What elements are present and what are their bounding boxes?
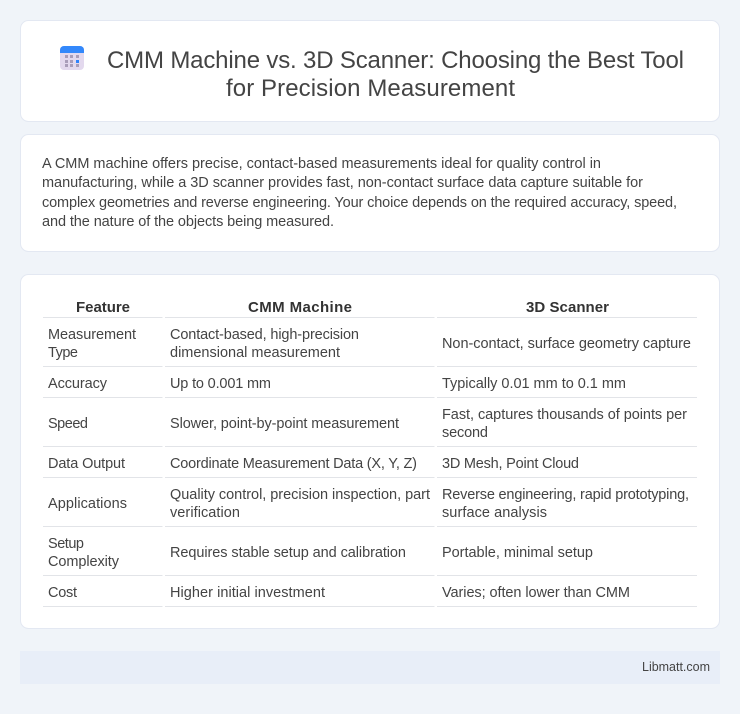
row: applications	[48, 487, 689, 521]
footer credit: Libmatt.com	[642, 660, 710, 674]
row: measurement type: dimensional measurement	[170, 345, 340, 361]
row: accuracy: Typically 0.01 mm to 0.1 mm	[442, 376, 626, 392]
row: applications: Quality control, precision inspection, part	[170, 487, 430, 503]
row: setup complexity: Complexity	[48, 554, 120, 570]
row: setup complexity: Portable, minimal setup	[442, 545, 593, 561]
footer bar	[20, 651, 720, 684]
text block: summary	[42, 156, 677, 230]
text block: summary: and the nature of the objects being measured.	[42, 214, 334, 230]
row: accuracy: Up to 0.001 mm	[170, 376, 271, 392]
row: measurement type: Non-contact, surface geometry capture	[442, 336, 691, 352]
row: cost	[48, 585, 630, 601]
panel: comparison table	[20, 274, 720, 628]
row: measurement type: Type	[48, 345, 78, 361]
row: setup complexity: Setup	[48, 536, 84, 552]
row: cost: Cost	[48, 585, 77, 601]
row: speed: Speed	[48, 416, 88, 432]
panel: title header	[20, 20, 720, 122]
row: setup complexity	[48, 536, 593, 570]
text block: summary: manufacturing, while a 3D scanner provides fast, non-contact surface data capture suitable for	[42, 175, 643, 191]
title	[107, 47, 684, 102]
row: speed: second	[442, 425, 488, 441]
row: cost: Higher initial investment	[170, 585, 325, 601]
row: applications: surface analysis	[442, 505, 547, 521]
row: measurement type	[48, 327, 691, 361]
panel: intro paragraph	[20, 134, 720, 252]
row: data output	[48, 456, 579, 472]
text block: summary: complex geometries and reverse engineering. Your choice depends on the required accuracy, speed,	[42, 195, 677, 211]
row: speed: Fast, captures thousands of points per	[442, 407, 687, 423]
row: applications: Applications	[48, 496, 127, 512]
row: accuracy	[48, 376, 626, 392]
title: CMM Machine vs. 3D Scanner: Choosing the Best Tool	[107, 47, 684, 74]
table header row	[76, 299, 609, 316]
row: accuracy: Accuracy	[48, 376, 108, 392]
row: applications: verification	[170, 505, 240, 521]
table header row: Feature	[76, 299, 130, 316]
row: data output: Data Output	[48, 456, 125, 472]
row: data output: 3D Mesh, Point Cloud	[442, 456, 579, 472]
row: cost: Varies; often lower than CMM	[442, 585, 630, 601]
text block: summary: A CMM machine offers precise, contact-based measurements ideal for quality control in	[42, 156, 601, 172]
title: for Precision Measurement	[226, 75, 515, 102]
table header row: 3D Scanner	[526, 299, 609, 316]
row: setup complexity: Requires stable setup and calibration	[170, 545, 406, 561]
row: speed: Slower, point-by-point measurement	[170, 416, 399, 432]
row: measurement type: Contact-based, high-precision	[170, 327, 359, 343]
table header row: CMM Machine	[248, 299, 352, 316]
icon: calendar grid	[60, 46, 84, 70]
row: data output: Coordinate Measurement Data (X, Y, Z)	[170, 456, 417, 472]
row: measurement type: Measurement	[48, 327, 136, 343]
row: applications: Reverse engineering, rapid prototyping,	[442, 487, 689, 503]
row: speed	[48, 407, 687, 441]
